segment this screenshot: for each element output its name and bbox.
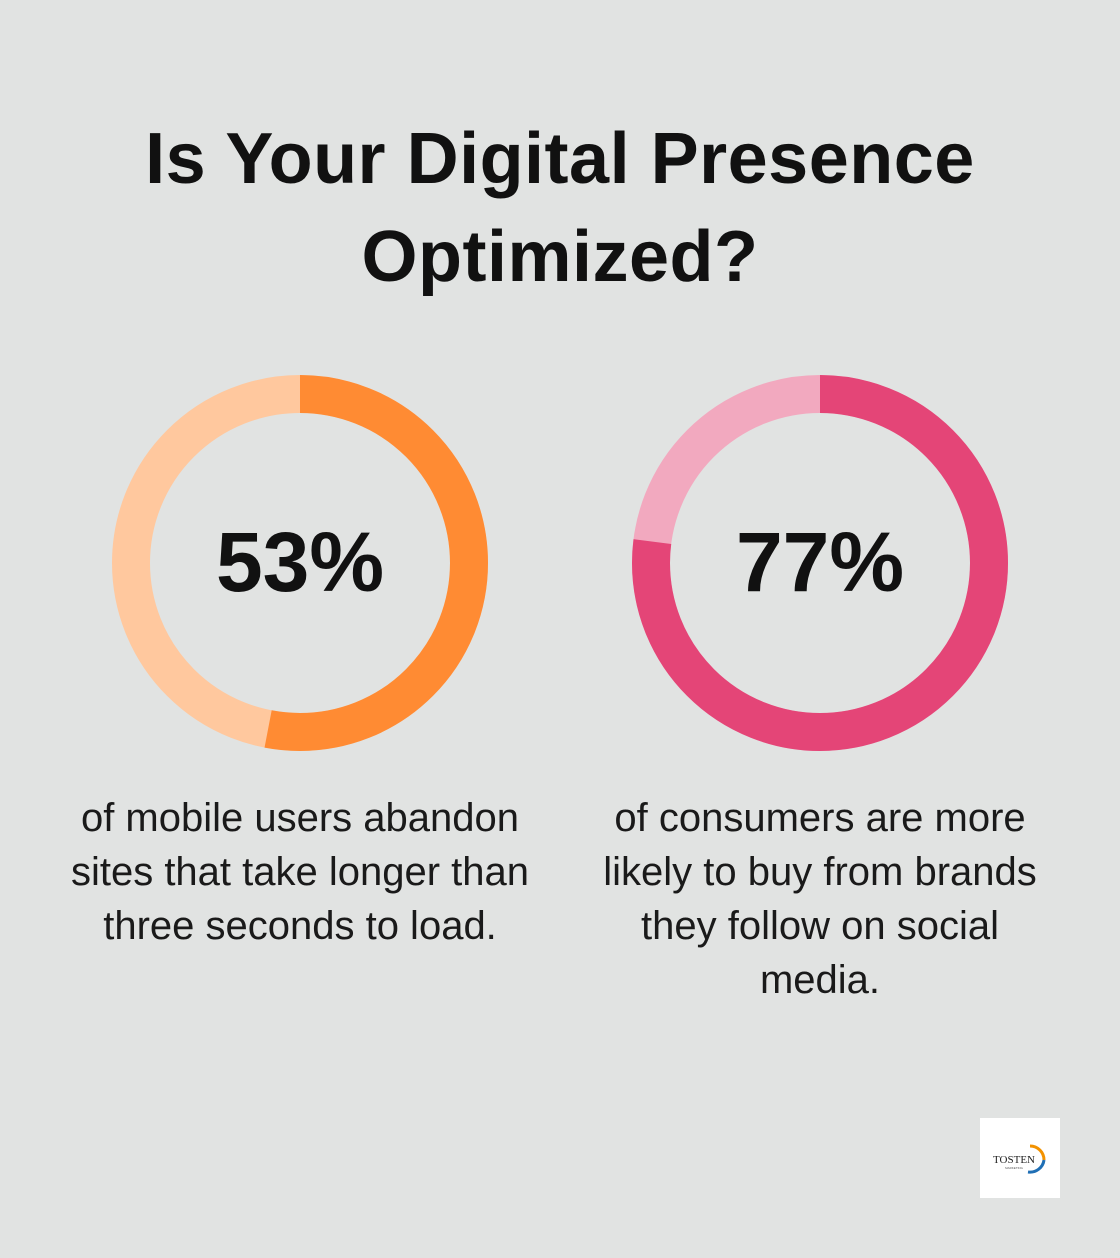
- logo: MARKETING: [1005, 1166, 1024, 1170]
- logo: TOSTEN: [993, 1154, 1035, 1166]
- chart: 53% donut: 53%: [216, 515, 384, 609]
- title: Is Your Digital Presence: [145, 119, 975, 199]
- caption: mobile users: of mobile users abandon: [81, 796, 519, 840]
- caption: mobile users: sites that take longer than: [71, 850, 529, 894]
- caption: consumers: likely to buy from brands: [603, 850, 1037, 894]
- chart: 77% donut: [632, 375, 1008, 751]
- caption: mobile users: [71, 796, 529, 948]
- caption: consumers: [603, 796, 1037, 1002]
- chart: 77% donut: 77%: [736, 515, 904, 609]
- title: Optimized?: [362, 217, 758, 297]
- caption: consumers: they follow on social: [641, 904, 999, 948]
- caption: mobile users: three seconds to load.: [103, 904, 497, 948]
- caption: consumers: media.: [760, 958, 880, 1002]
- chart: 53% donut: [112, 375, 488, 751]
- title: [145, 119, 975, 297]
- logo: [980, 1118, 1060, 1198]
- caption: consumers: of consumers are more: [614, 796, 1026, 840]
